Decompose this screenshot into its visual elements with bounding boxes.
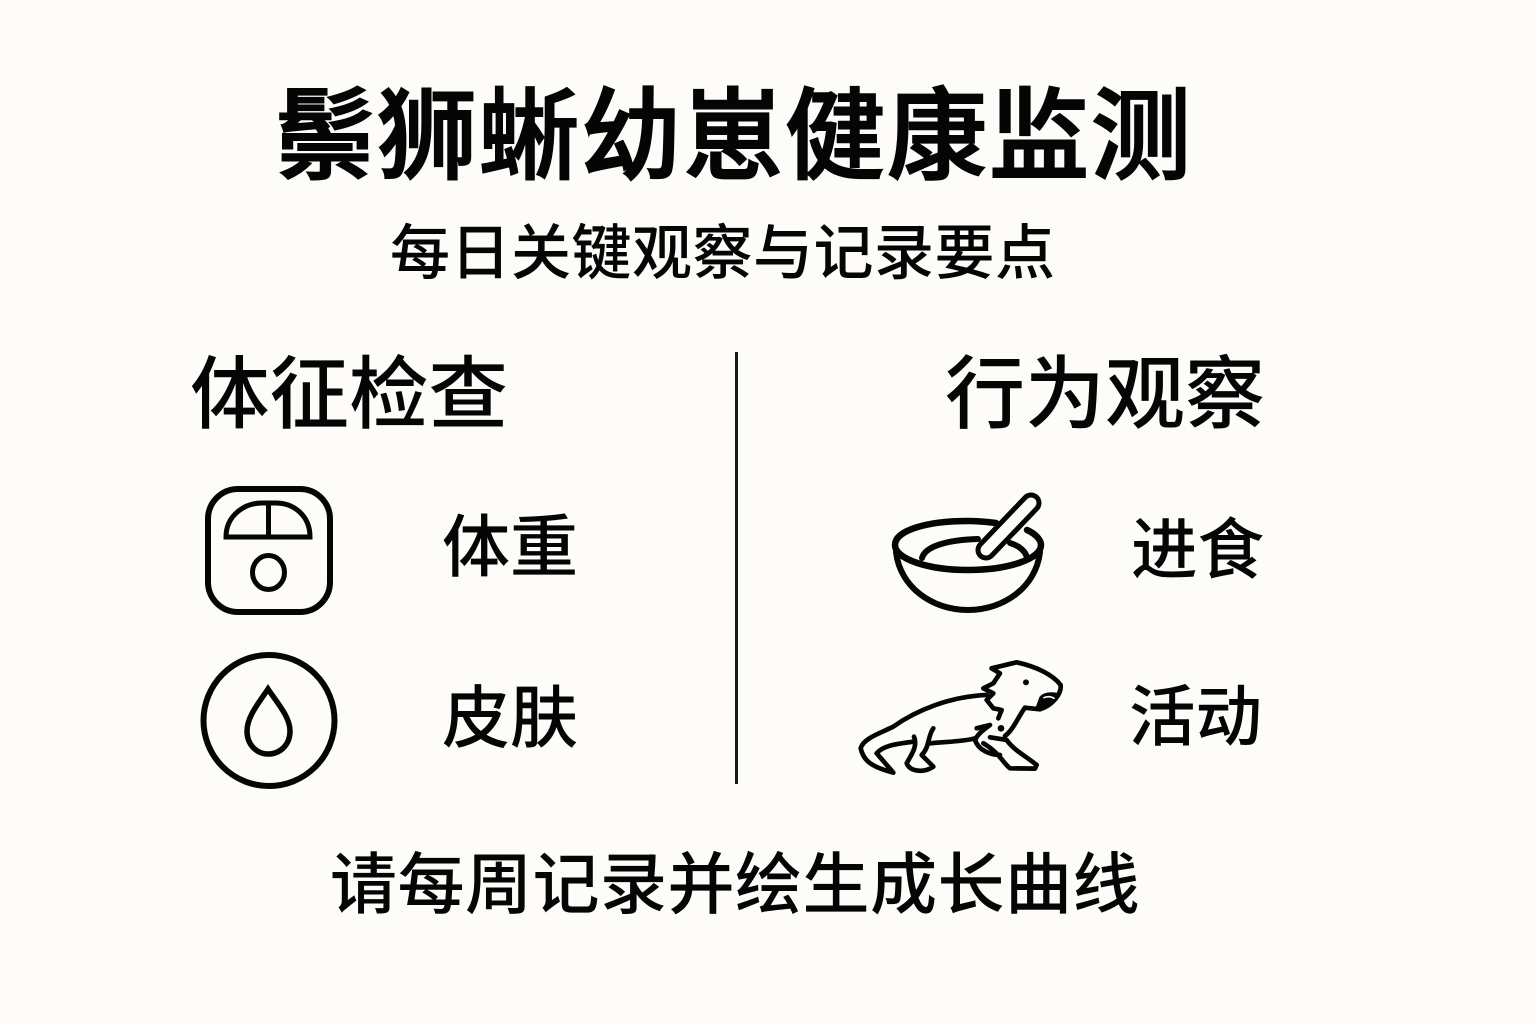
heading: behaviour observation: 行为观察	[945, 350, 1265, 439]
divider line	[735, 352, 738, 784]
label: skin: 皮肤	[442, 681, 578, 757]
label: weight: 体重	[442, 510, 578, 586]
footer note: 请每周记录并绘生成长曲线	[330, 848, 1140, 923]
title: 鬃狮蜥幼崽健康监测	[275, 81, 1193, 193]
label: activity: 活动	[1129, 681, 1262, 755]
subtitle: 每日关键观察与记录要点	[390, 220, 1056, 287]
heading: vital signs check: 体征检查	[190, 350, 508, 439]
label: feeding: 进食	[1131, 514, 1264, 588]
